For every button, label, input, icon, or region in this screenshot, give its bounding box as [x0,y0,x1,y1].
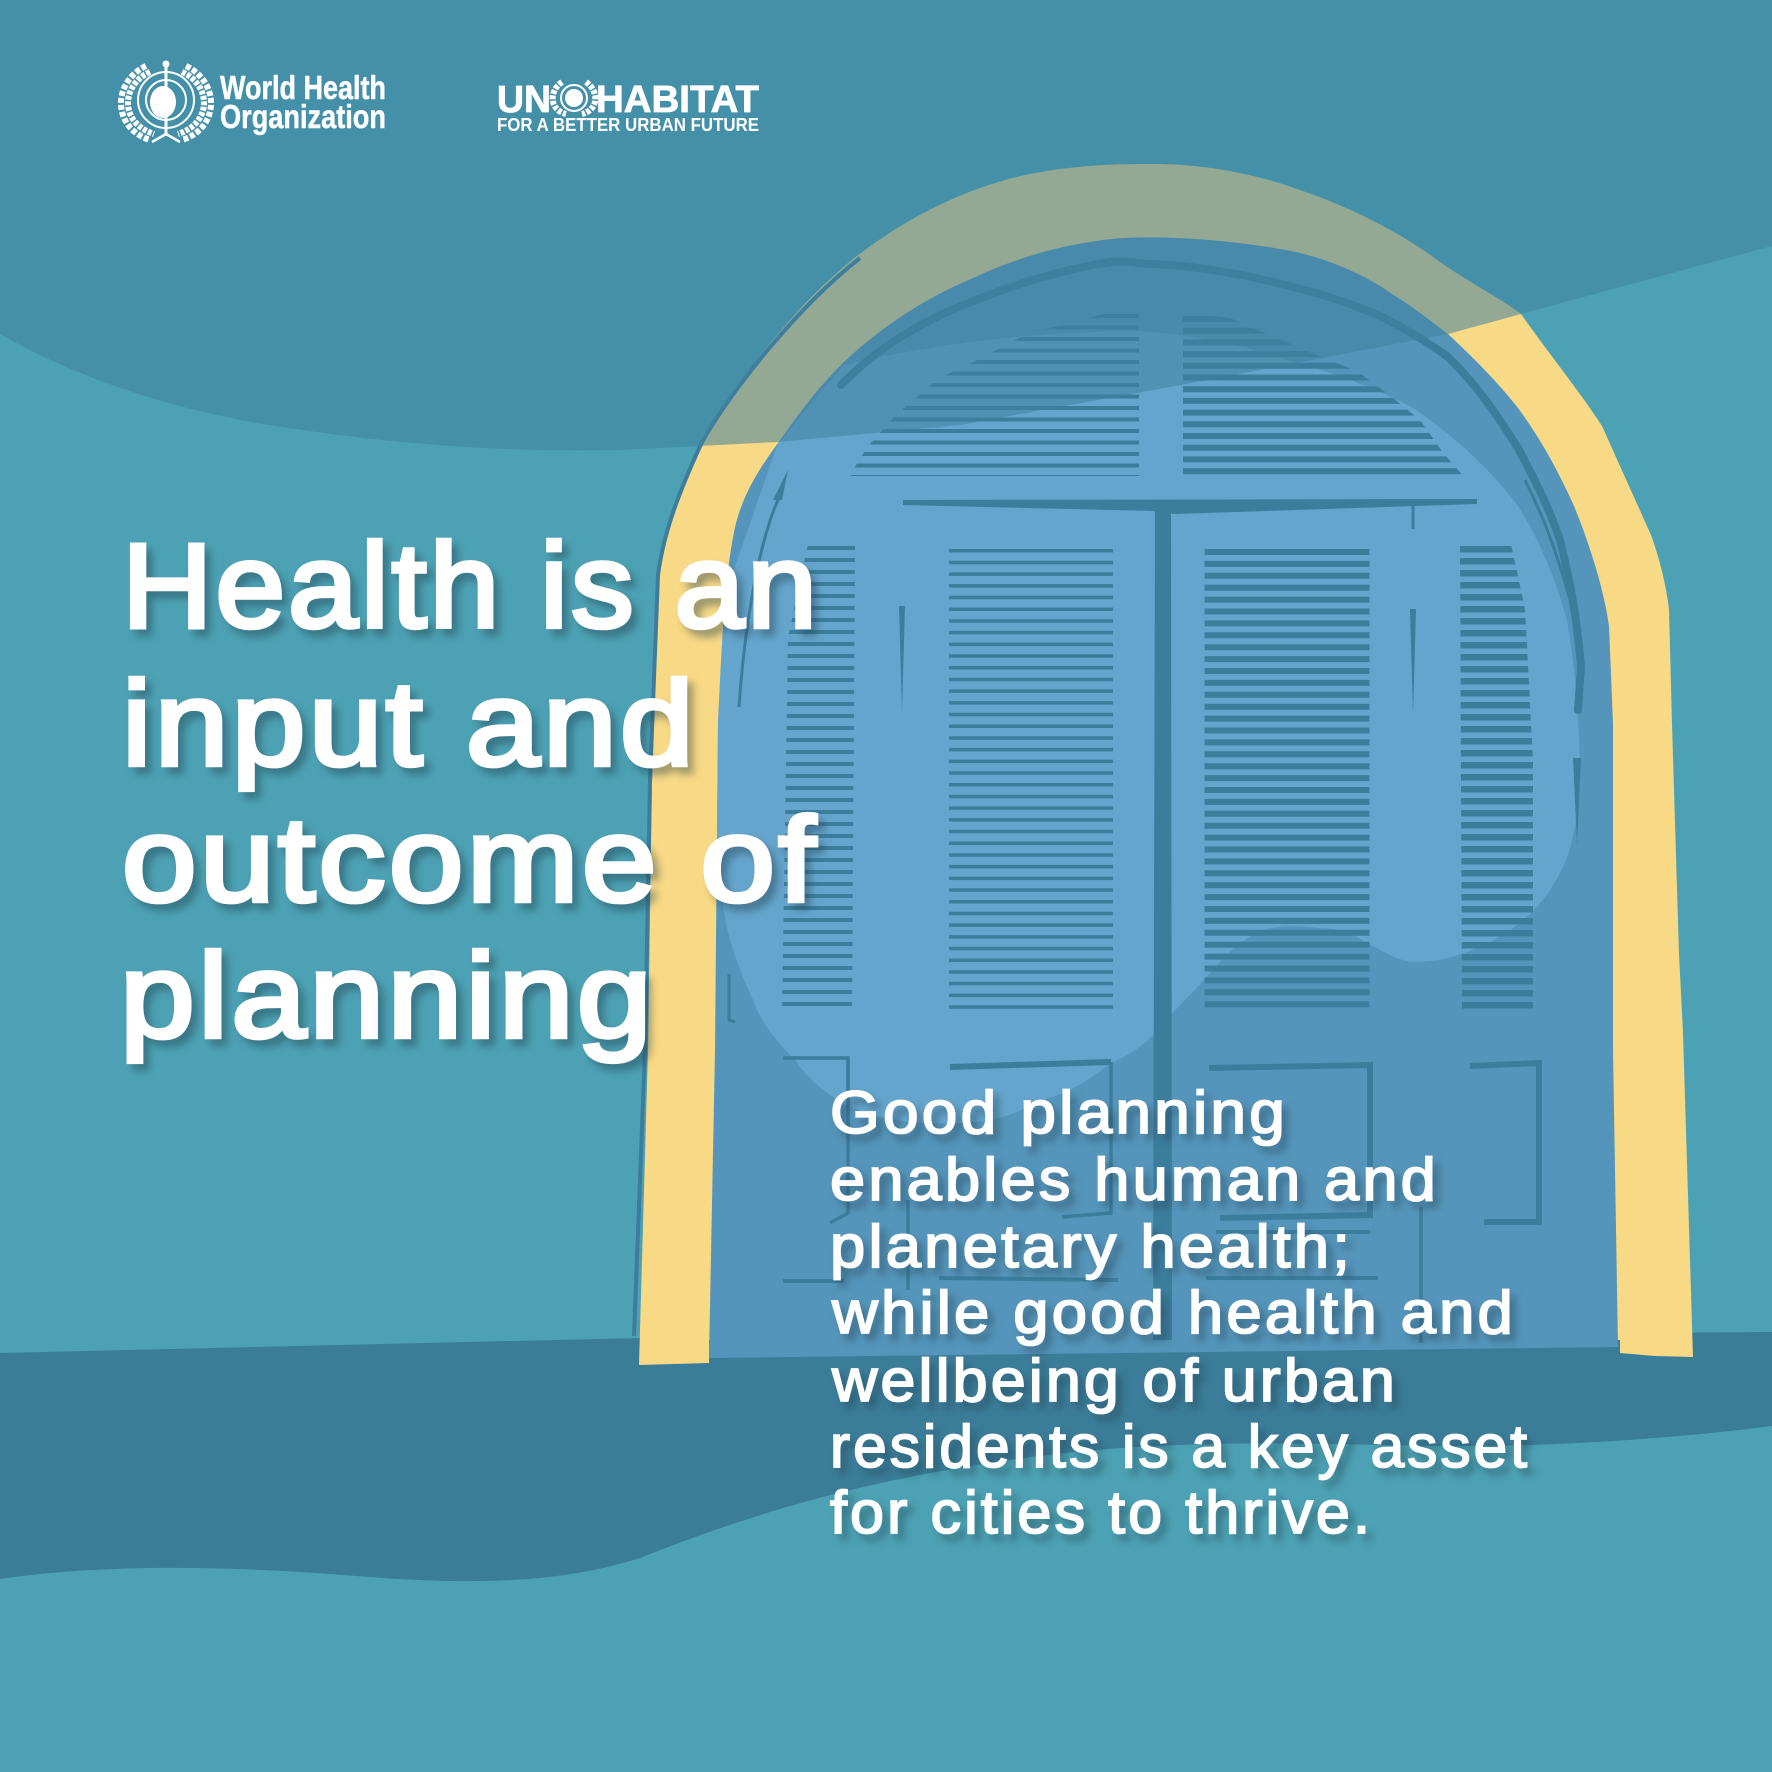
left edge shadow line [634,258,860,1336]
body text: wellbeing of urban [831,1347,1398,1414]
logo text: World Health [220,69,386,106]
headline [120,519,820,1063]
shutter louvers far right [1460,546,1534,1012]
shutter louvers centre right [1204,549,1370,1012]
shutter louvers centre left [949,549,1113,1012]
lintel [903,499,1477,514]
logo: World Health Organization: Organization [220,98,386,135]
body text: planetary health; [830,1213,1353,1280]
shutter louvers far left [782,546,858,1012]
lower panels [783,1058,1421,1343]
logo wordmark: UN [497,79,551,121]
arch moulding lines [841,261,1581,710]
yellow arch [639,164,1693,1365]
body text: residents is a key asset [830,1413,1530,1480]
headline: Health is an [122,519,820,653]
body text [830,1079,1530,1546]
body text: Good planning [830,1079,1288,1146]
headline: input and [122,657,697,791]
icon: UN emblem [553,82,595,114]
light blue blob on door [700,331,1580,1123]
door line art [634,258,1581,1343]
headline: outcome of [122,793,819,927]
fan louvers left [851,314,1139,476]
logo: UN-Habitat [497,79,759,135]
icon: WHO emblem [121,60,211,142]
logo: World Health Organization [121,60,386,142]
headline: planning [120,929,655,1063]
body text: enables human and [830,1146,1439,1213]
top dark wave overlay [0,0,1772,450]
fan louvers right [1183,316,1467,478]
logo tagline: FOR A BETTER URBAN FUTURE [497,115,759,135]
body text: for cities to thrive. [830,1479,1373,1546]
arch inner shadow [1525,480,1570,600]
body text: while good health and [831,1279,1516,1346]
door fill [709,237,1618,1358]
logo: UN-Habitat: HABITAT [596,79,759,121]
bottom dark wave band [0,1332,1772,1581]
small stiles [729,500,1413,1022]
centre post [1153,506,1172,1340]
